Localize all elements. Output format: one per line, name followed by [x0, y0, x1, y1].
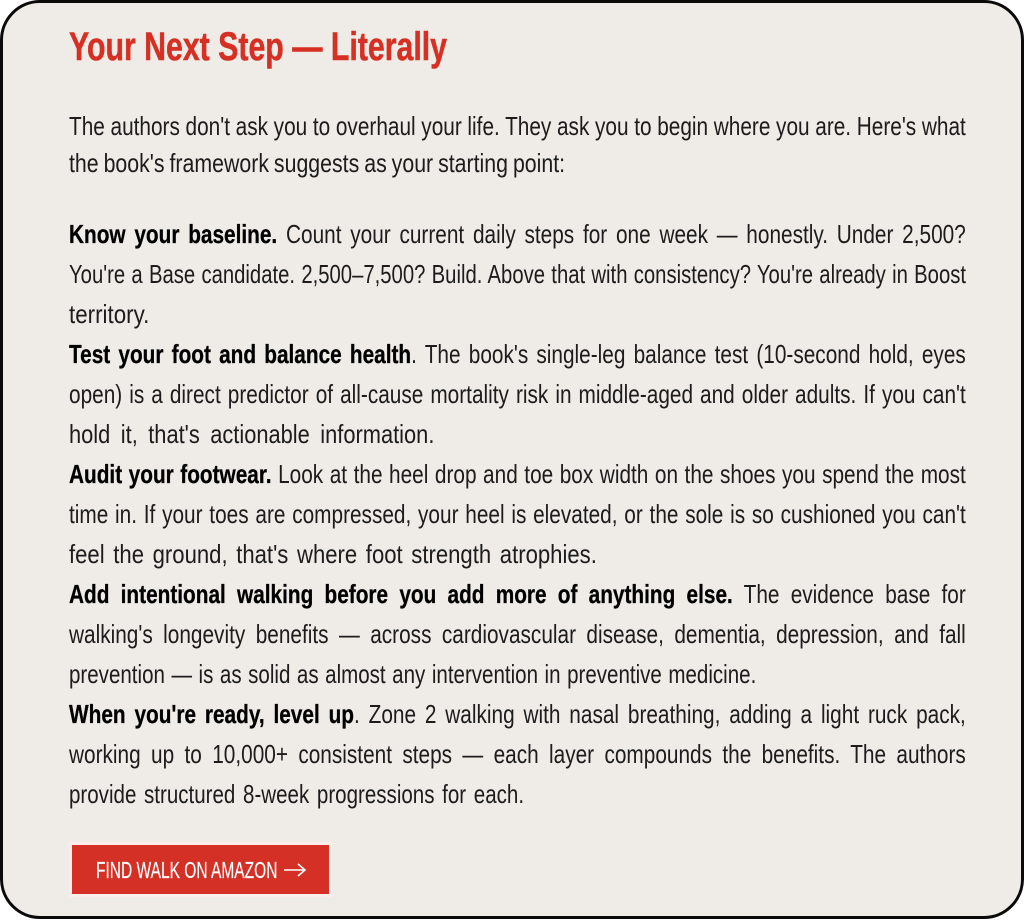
text block: add intentional walking: Add intentional walking before you add more of anything else. The evidence base for — [69, 579, 966, 609]
text block: add intentional walking: walking's longevity benefits — across cardiovascular disease, dementia, depression, and fall — [69, 619, 966, 649]
text block: test foot and balance health: hold it, that's actionable information. — [69, 419, 434, 449]
text block: audit your footwear: feel the ground, that's where foot strength atrophies. — [69, 539, 597, 569]
text block: level up: working up to 10,000+ consistent steps — each layer compounds the benefits. The authors — [69, 739, 966, 769]
text block: add intentional walking — [69, 579, 966, 689]
text block: test foot and balance health — [69, 339, 966, 449]
text block: audit your footwear: Audit your footwear. Look at the heel drop and toe box width on the shoes you spend the most — [69, 459, 966, 489]
text block: know your baseline: Know your baseline. Count your current daily steps for one week — honestly. Under 2,500? — [69, 219, 966, 249]
button: find walk on amazon — [69, 842, 332, 897]
text block: test foot and balance health: Test your foot and balance health. The book's single-leg balance test (10-second hold, eyes — [69, 339, 966, 369]
text block: test foot and balance health: open) is a direct predictor of all-cause mortality risk in middle-aged and older adults. If you can't — [69, 379, 966, 409]
text block: level up: provide structured 8-week progressions for each. — [69, 779, 524, 809]
text block: introduction: the book's framework suggests as your starting point: — [69, 148, 565, 178]
text block: know your baseline: You're a Base candidate. 2,500–7,500? Build. Above that with consistency? You're already in Boost — [69, 259, 966, 289]
text block: know your baseline — [69, 219, 966, 329]
text block: audit your footwear — [69, 459, 966, 569]
text block: introduction: The authors don't ask you to overhaul your life. They ask you to begin where you are. Here's what — [69, 111, 966, 141]
button: find walk on amazon: FIND WALK ON AMAZON — [96, 857, 277, 883]
title: Your Next Step — Literally — [69, 25, 447, 69]
text block: know your baseline: territory. — [69, 299, 149, 329]
text block: introduction — [69, 111, 966, 178]
text block: level up — [68, 699, 966, 809]
text block: level up: When you're ready, level up. Zone 2 walking with nasal breathing, adding a light ruck pack, — [69, 699, 966, 729]
icon: arrow — [284, 863, 306, 877]
text block: add intentional walking: prevention — is as solid as almost any intervention in preventive medicine. — [69, 659, 756, 689]
text block: audit your footwear: time in. If your toes are compressed, your heel is elevated, or the sole is so cushioned you can't — [69, 499, 966, 529]
